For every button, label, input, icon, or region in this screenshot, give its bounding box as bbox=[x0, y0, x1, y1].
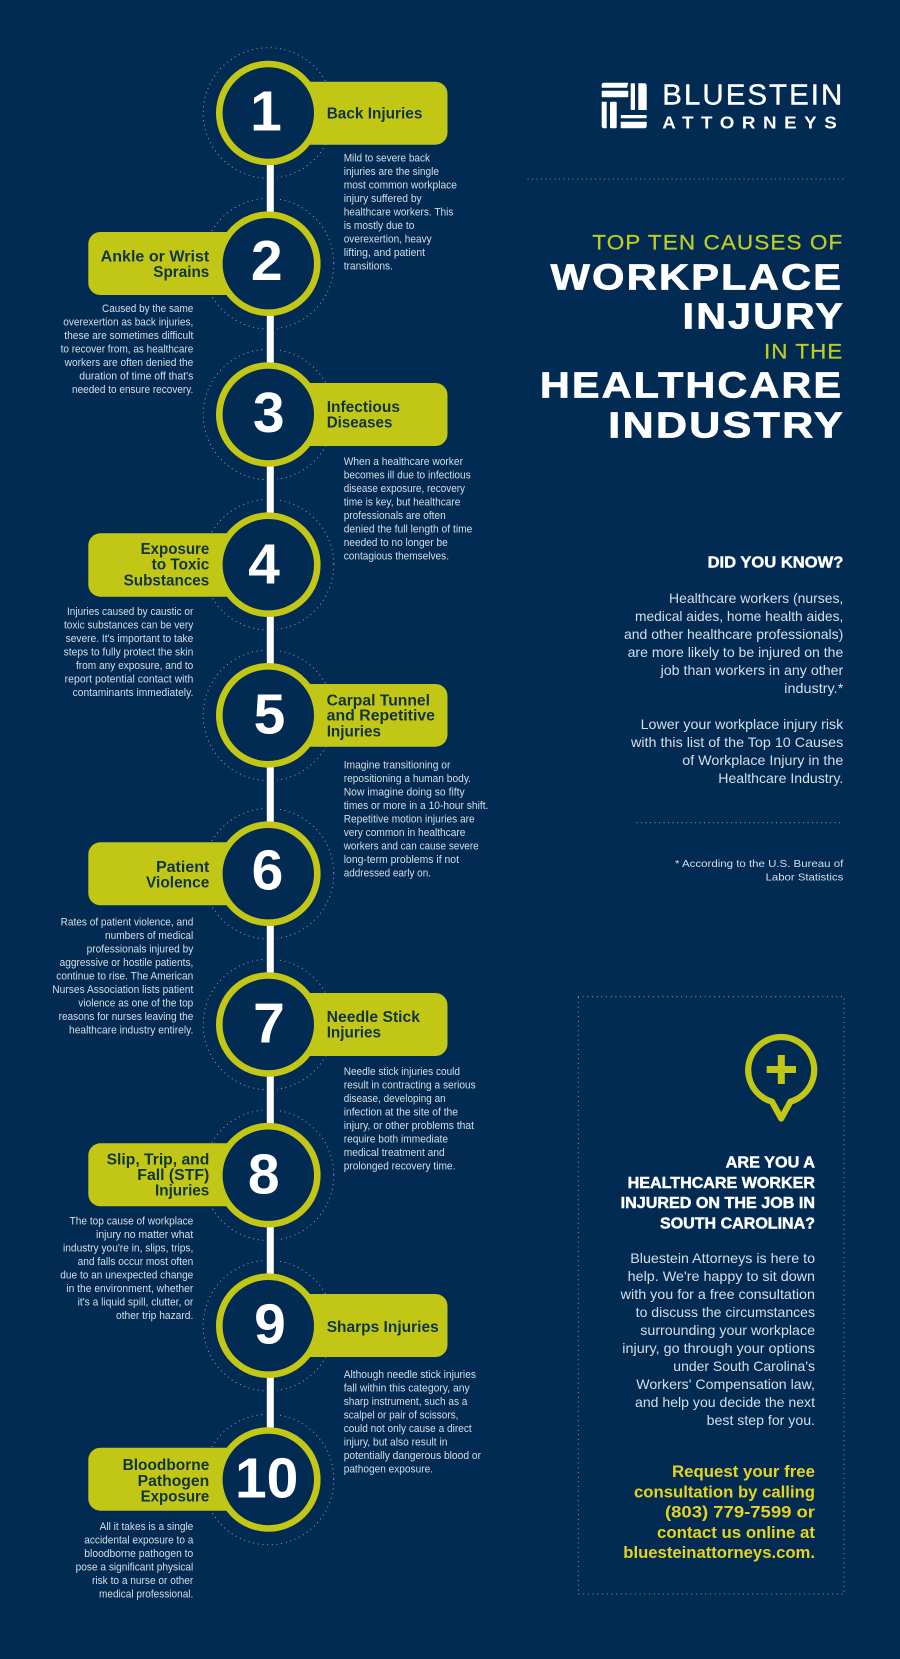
panel dotted border bbox=[578, 997, 844, 1594]
pill title: Injuries bbox=[327, 1025, 381, 1042]
title: INJURY bbox=[683, 295, 845, 336]
number circle bbox=[219, 976, 317, 1074]
panel body text: and help you decide the next bbox=[635, 1395, 815, 1410]
pill bbox=[268, 82, 448, 145]
panel body text bbox=[620, 1251, 815, 1428]
description: steps to fully protect the skin bbox=[64, 646, 193, 658]
pill title: and Repetitive bbox=[327, 708, 435, 725]
number: 9 bbox=[254, 1292, 286, 1356]
number: 2 bbox=[251, 229, 283, 293]
logo sub-wordmark: ATTORNEYS bbox=[662, 112, 844, 132]
pill bbox=[268, 684, 448, 747]
description: Now imagine doing so fifty bbox=[344, 786, 465, 798]
number circle bbox=[219, 1277, 317, 1375]
pill title: Pathogen bbox=[138, 1473, 209, 1490]
panel body text: Bluestein Attorneys is here to bbox=[630, 1251, 815, 1266]
description: require both immediate bbox=[344, 1134, 448, 1146]
panel heading: ARE YOU A bbox=[726, 1154, 815, 1172]
description: needed to ensure recovery. bbox=[72, 384, 193, 396]
description: fall within this category, any bbox=[344, 1382, 470, 1394]
panel heading: SOUTH CAROLINA? bbox=[660, 1216, 815, 1232]
description: transitions. bbox=[344, 261, 393, 273]
description: becomes ill due to infectious bbox=[344, 470, 471, 482]
description: bloodborne pathogen to bbox=[84, 1548, 193, 1560]
pill title: Needle Stick bbox=[327, 1009, 420, 1026]
footnote bbox=[675, 859, 843, 884]
description: violence as one of the top bbox=[78, 997, 193, 1009]
description: lifting, and patient bbox=[344, 247, 425, 259]
description bbox=[344, 1369, 481, 1476]
dotted halos around step circles bbox=[203, 48, 334, 1545]
panel call to action: bluesteinattorneys.com. bbox=[623, 1544, 815, 1562]
did you know text: are more likely to be injured on the bbox=[628, 645, 843, 660]
footnote: Labor Statistics bbox=[766, 873, 843, 884]
pill title: Sharps Injuries bbox=[327, 1319, 439, 1336]
did you know text: of Workplace Injury in the bbox=[682, 753, 843, 768]
pill title bbox=[123, 1457, 210, 1506]
did you know text: Healthcare workers (nurses, bbox=[669, 591, 843, 606]
divider under logo bbox=[528, 178, 845, 180]
panel body text: under South Carolina's bbox=[673, 1359, 815, 1374]
description: due to an unexpected change bbox=[60, 1270, 193, 1282]
description: times or more in a 10-hour shift. bbox=[344, 800, 488, 812]
description: repositioning a human body. bbox=[344, 773, 471, 785]
description bbox=[60, 1216, 194, 1322]
pill title: Ankle or Wrist bbox=[101, 248, 209, 265]
pill title bbox=[327, 692, 435, 740]
description: report potential contact with bbox=[65, 674, 193, 686]
number: 6 bbox=[252, 838, 283, 902]
description: overexertion, heavy bbox=[344, 234, 432, 246]
pill title: Bloodborne bbox=[123, 1457, 210, 1474]
description: severe. It's important to take bbox=[66, 633, 193, 645]
description bbox=[344, 153, 457, 273]
description: overexertion as back injuries, bbox=[63, 316, 193, 328]
description: disease, developing an bbox=[344, 1093, 446, 1105]
footnote: * According to the U.S. Bureau of bbox=[675, 859, 843, 870]
title: WORKPLACE bbox=[551, 256, 843, 297]
description: contagious themselves. bbox=[344, 550, 449, 562]
description: needed to no longer be bbox=[344, 537, 448, 549]
logo wordmark: BLUESTEIN bbox=[662, 79, 844, 111]
description: professionals injured by bbox=[87, 943, 194, 955]
pill title: Back Injuries bbox=[327, 106, 422, 123]
pill title: Exposure bbox=[141, 541, 210, 558]
description: Caused by the same bbox=[102, 303, 193, 315]
description: Nurses Association lists patient bbox=[52, 984, 193, 996]
number: 8 bbox=[248, 1142, 280, 1206]
description: other trip hazard. bbox=[116, 1310, 193, 1322]
panel heading: HEALTHCARE WORKER bbox=[628, 1175, 815, 1192]
number circle bbox=[219, 366, 317, 464]
panel call to action: contact us online at bbox=[657, 1524, 816, 1542]
title bbox=[540, 231, 845, 445]
panel call to action: consultation by calling bbox=[634, 1483, 815, 1501]
pill title: Fall (STF) bbox=[137, 1167, 209, 1184]
pill title: Diseases bbox=[327, 415, 392, 432]
step 1: back injuries bbox=[219, 64, 457, 273]
title: IN THE bbox=[764, 340, 843, 363]
did you know text: and other healthcare professionals) bbox=[624, 627, 843, 642]
description: potentially dangerous blood or bbox=[344, 1450, 481, 1462]
pill title: Violence bbox=[146, 875, 210, 892]
description: workers are often denied the bbox=[64, 357, 193, 369]
pill bbox=[88, 232, 268, 295]
description: accidental exposure to a bbox=[84, 1534, 193, 1546]
description: All it takes is a single bbox=[100, 1521, 193, 1533]
step 7: needle stick injuries bbox=[219, 976, 476, 1172]
description: injury, or other problems that bbox=[344, 1120, 474, 1132]
step 8: slip, trip, and fall injuries bbox=[60, 1126, 317, 1322]
pill title: Sprains bbox=[153, 264, 209, 281]
description bbox=[344, 456, 472, 562]
number: 7 bbox=[253, 992, 285, 1056]
panel call to action bbox=[623, 1463, 816, 1562]
pill title: Injuries bbox=[155, 1183, 209, 1200]
description: very common in healthcare bbox=[344, 827, 465, 839]
description: contaminants immediately. bbox=[73, 687, 193, 699]
pill title: Carpal Tunnel bbox=[327, 692, 430, 709]
number: 1 bbox=[250, 80, 282, 144]
description: disease exposure, recovery bbox=[344, 483, 466, 495]
description: Repetitive motion injuries are bbox=[344, 813, 475, 825]
description: could not only cause a direct bbox=[344, 1423, 472, 1435]
title: TOP TEN CAUSES OF bbox=[592, 231, 843, 254]
pill bbox=[268, 1294, 448, 1357]
description: Needle stick injuries could bbox=[344, 1066, 460, 1078]
description: is mostly due to bbox=[344, 220, 414, 232]
description: The top cause of workplace bbox=[70, 1216, 193, 1228]
description bbox=[64, 606, 194, 699]
number circle bbox=[219, 1430, 317, 1528]
pill title bbox=[146, 859, 210, 892]
description bbox=[76, 1521, 194, 1600]
description: and falls occur most often bbox=[78, 1256, 193, 1268]
description: numbers of medical bbox=[105, 930, 193, 942]
description: prolonged recovery time. bbox=[344, 1160, 455, 1172]
number circle bbox=[219, 516, 317, 614]
pill title: Infectious bbox=[327, 399, 400, 416]
description: sharp instrument, such as a bbox=[344, 1396, 467, 1408]
number: 10 bbox=[235, 1446, 298, 1510]
call-to-action panel bbox=[578, 997, 844, 1594]
pill title bbox=[327, 399, 400, 432]
description: reasons for nurses leaving the bbox=[59, 1011, 193, 1023]
description: pathogen exposure. bbox=[344, 1464, 433, 1476]
description bbox=[61, 303, 193, 396]
pill title: Slip, Trip, and bbox=[107, 1151, 209, 1168]
panel body text: surrounding your workplace bbox=[640, 1323, 815, 1338]
did you know text bbox=[624, 591, 844, 786]
divider above footnote bbox=[637, 822, 844, 824]
description: in the environment, whether bbox=[66, 1283, 194, 1295]
pill title: Patient bbox=[156, 859, 209, 876]
pill title bbox=[101, 248, 209, 281]
description: addressed early on. bbox=[344, 867, 431, 879]
did you know text: job than workers in any other bbox=[660, 663, 844, 678]
pill bbox=[268, 383, 448, 446]
description: scalpel or pair of scissors, bbox=[344, 1410, 458, 1422]
panel call to action: Request your free bbox=[672, 1463, 815, 1481]
description: risk to a nurse or other bbox=[92, 1575, 194, 1587]
description: medical professional. bbox=[99, 1588, 193, 1600]
title: HEALTHCARE bbox=[540, 365, 843, 406]
description: denied the full length of time bbox=[344, 524, 472, 536]
description: continue to rise. The American bbox=[56, 970, 193, 982]
step 10: bloodborne pathogen exposure bbox=[76, 1430, 317, 1600]
description: Although needle stick injuries bbox=[344, 1369, 476, 1381]
panel body text: help. We're happy to sit down bbox=[628, 1269, 815, 1284]
did you know heading: DID YOU KNOW? bbox=[708, 555, 843, 572]
description: to recover from, as healthcare bbox=[61, 344, 193, 356]
description: healthcare industry entirely. bbox=[69, 1024, 193, 1036]
step 3: infectious diseases bbox=[219, 366, 472, 562]
logo: Bluestein Attorneys bbox=[602, 79, 844, 132]
description: from any exposure, and to bbox=[76, 660, 193, 672]
description: duration of time off that's bbox=[79, 370, 193, 382]
pill title: Injuries bbox=[327, 723, 381, 740]
timeline connector bbox=[264, 113, 277, 1479]
step 9: sharps injuries bbox=[219, 1277, 481, 1476]
number: 4 bbox=[248, 532, 280, 596]
description: workers and can cause severe bbox=[343, 840, 479, 852]
pill title: Exposure bbox=[141, 1489, 210, 1506]
description: industry you're in, slips, trips, bbox=[63, 1243, 193, 1255]
pill bbox=[88, 533, 268, 597]
description: medical treatment and bbox=[344, 1147, 445, 1159]
number circle bbox=[219, 64, 317, 162]
panel heading bbox=[621, 1154, 815, 1232]
description: pose a significant physical bbox=[76, 1562, 193, 1574]
panel body text: with you for a free consultation bbox=[620, 1287, 815, 1302]
description bbox=[344, 1066, 476, 1172]
description: aggressive or hostile patients, bbox=[60, 957, 193, 969]
title: INDUSTRY bbox=[608, 404, 845, 445]
step 5: carpal tunnel and repetitive injuries bbox=[219, 666, 488, 879]
pill title bbox=[124, 541, 210, 589]
description: Mild to severe back bbox=[344, 153, 431, 165]
pill title bbox=[107, 1151, 209, 1200]
description: Injuries caused by caustic or bbox=[67, 606, 194, 618]
number circle bbox=[219, 666, 317, 764]
description bbox=[343, 759, 488, 879]
pill title: to Toxic bbox=[152, 557, 210, 574]
number: 3 bbox=[253, 381, 285, 445]
description: healthcare workers. This bbox=[344, 207, 453, 219]
description: time is key, but healthcare bbox=[344, 496, 460, 508]
description: injury, but also result in bbox=[344, 1436, 447, 1448]
description: result in contracting a serious bbox=[344, 1080, 476, 1092]
description: toxic substances can be very bbox=[64, 620, 194, 632]
description: injury suffered by bbox=[344, 193, 422, 205]
description: Imagine transitioning or bbox=[344, 759, 451, 771]
description: When a healthcare worker bbox=[344, 456, 463, 468]
step 4: exposure to toxic substances bbox=[64, 516, 317, 699]
did you know text: Healthcare Industry. bbox=[718, 771, 843, 786]
description: long-term problems if not bbox=[344, 854, 459, 866]
pill bbox=[88, 1143, 268, 1206]
did you know text: with this list of the Top 10 Causes bbox=[630, 735, 844, 750]
description: most common workplace bbox=[344, 180, 457, 192]
panel body text: to discuss the circumstances bbox=[636, 1305, 815, 1320]
panel body text: Workers' Compensation law, bbox=[636, 1377, 815, 1392]
pill bbox=[268, 993, 448, 1056]
description: professionals are often bbox=[344, 510, 446, 522]
description bbox=[52, 916, 194, 1036]
icon: medical speech pin bbox=[748, 1037, 814, 1118]
description: injury no matter what bbox=[96, 1229, 193, 1241]
description: these are sometimes difficult bbox=[64, 330, 193, 342]
pill title: Substances bbox=[124, 572, 209, 589]
logo mark bbox=[602, 83, 647, 128]
number circle bbox=[219, 1126, 317, 1224]
panel body text: best step for you. bbox=[707, 1413, 815, 1428]
number circle bbox=[219, 215, 317, 313]
step 2: ankle or wrist sprains bbox=[61, 215, 317, 396]
pill bbox=[88, 1448, 268, 1511]
description: Rates of patient violence, and bbox=[61, 916, 193, 928]
description: injuries are the single bbox=[344, 166, 439, 178]
did you know text: medical aides, home health aides, bbox=[635, 609, 843, 624]
pill title bbox=[327, 1009, 420, 1042]
panel heading: INJURED ON THE JOB IN bbox=[621, 1195, 815, 1212]
number: 5 bbox=[254, 682, 285, 746]
did you know text: Lower your workplace injury risk bbox=[641, 717, 844, 732]
pill bbox=[88, 842, 268, 905]
did you know text: industry.* bbox=[784, 681, 844, 696]
panel call to action: (803) 779-7599 or bbox=[665, 1504, 816, 1522]
panel body text: injury, go through your options bbox=[622, 1341, 815, 1356]
number circle bbox=[219, 825, 317, 923]
description: it's a liquid spill, clutter, or bbox=[78, 1297, 194, 1309]
step 6: patient violence bbox=[52, 825, 317, 1036]
description: infection at the site of the bbox=[344, 1106, 458, 1118]
